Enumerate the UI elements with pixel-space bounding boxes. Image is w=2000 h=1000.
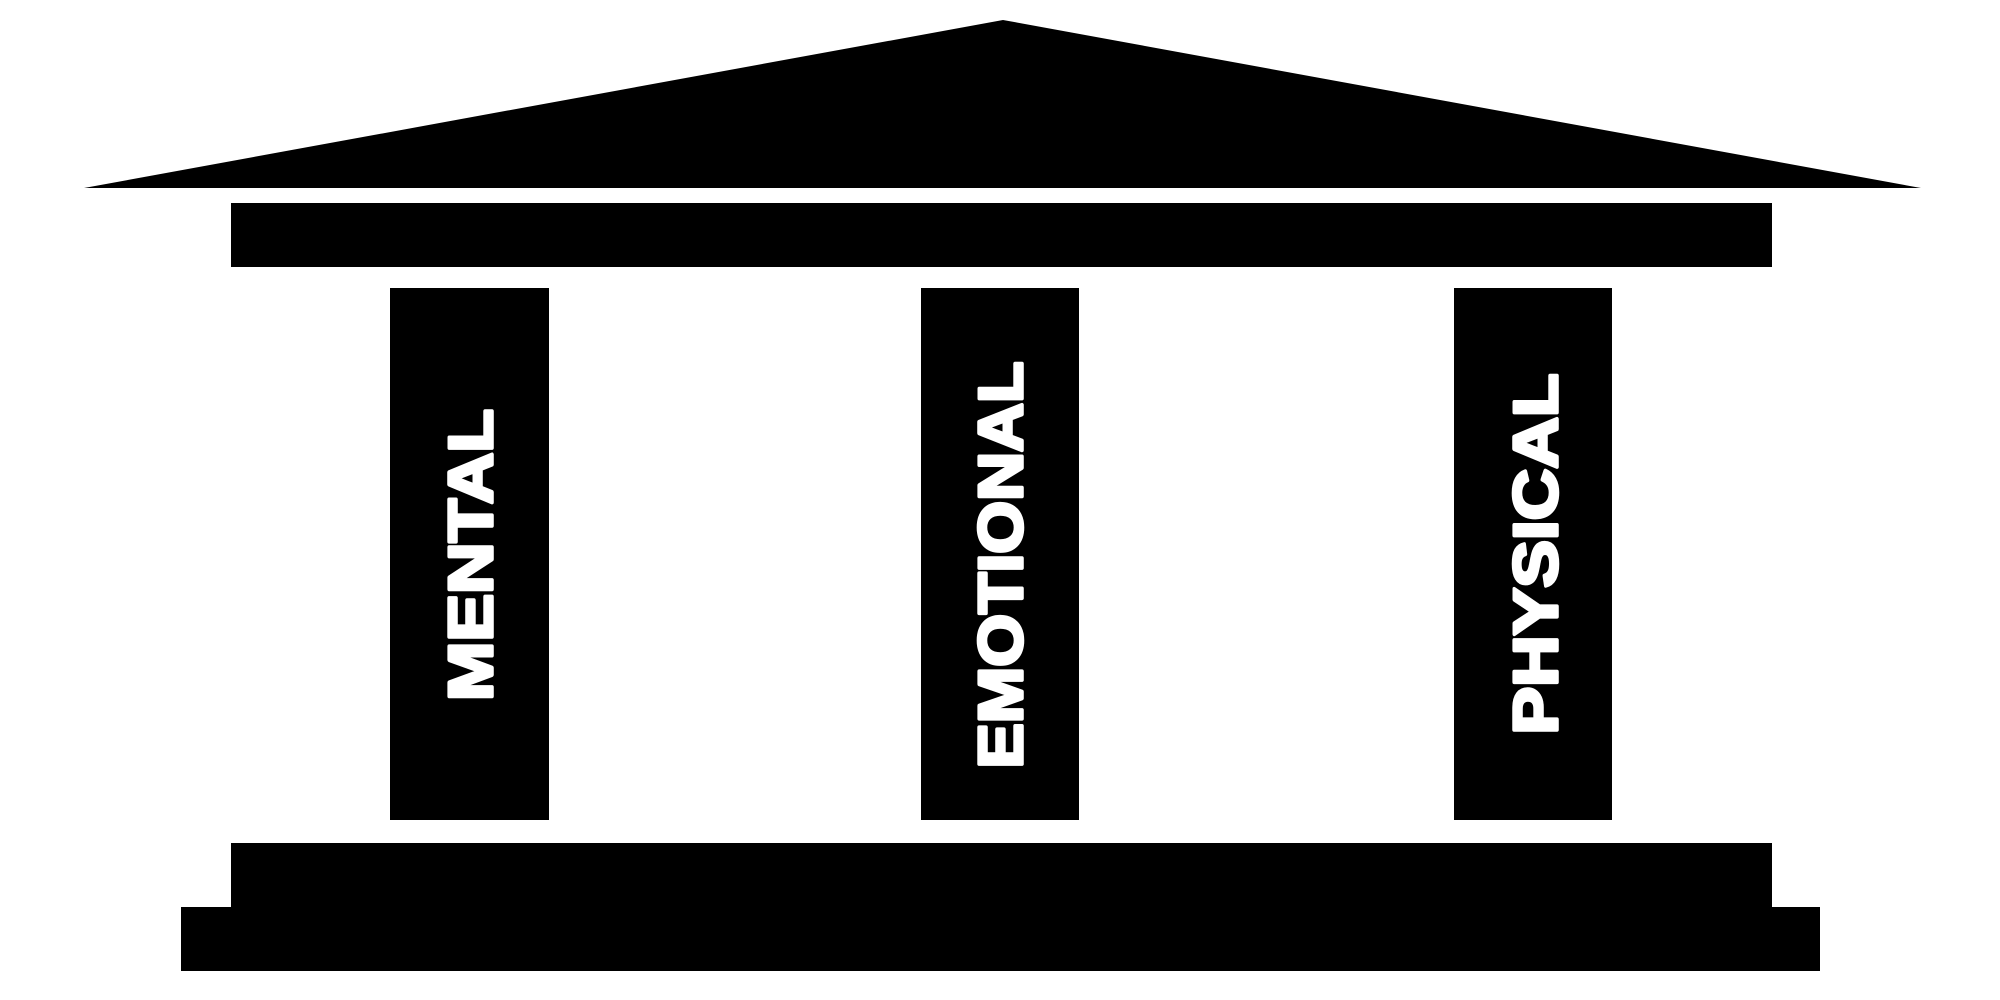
- label: physical: PHYSICAL: [1502, 374, 1571, 734]
- base: lower step: [181, 907, 1820, 971]
- label: mental: MENTAL: [437, 409, 506, 701]
- column: physical: [1454, 288, 1612, 820]
- label: emotional: EMOTIONAL: [967, 362, 1036, 768]
- roof pediment: [84, 20, 1921, 188]
- base: upper step: [231, 843, 1772, 908]
- entablature beam: [231, 203, 1772, 267]
- column: emotional: [921, 288, 1079, 820]
- column: mental: [390, 288, 549, 820]
